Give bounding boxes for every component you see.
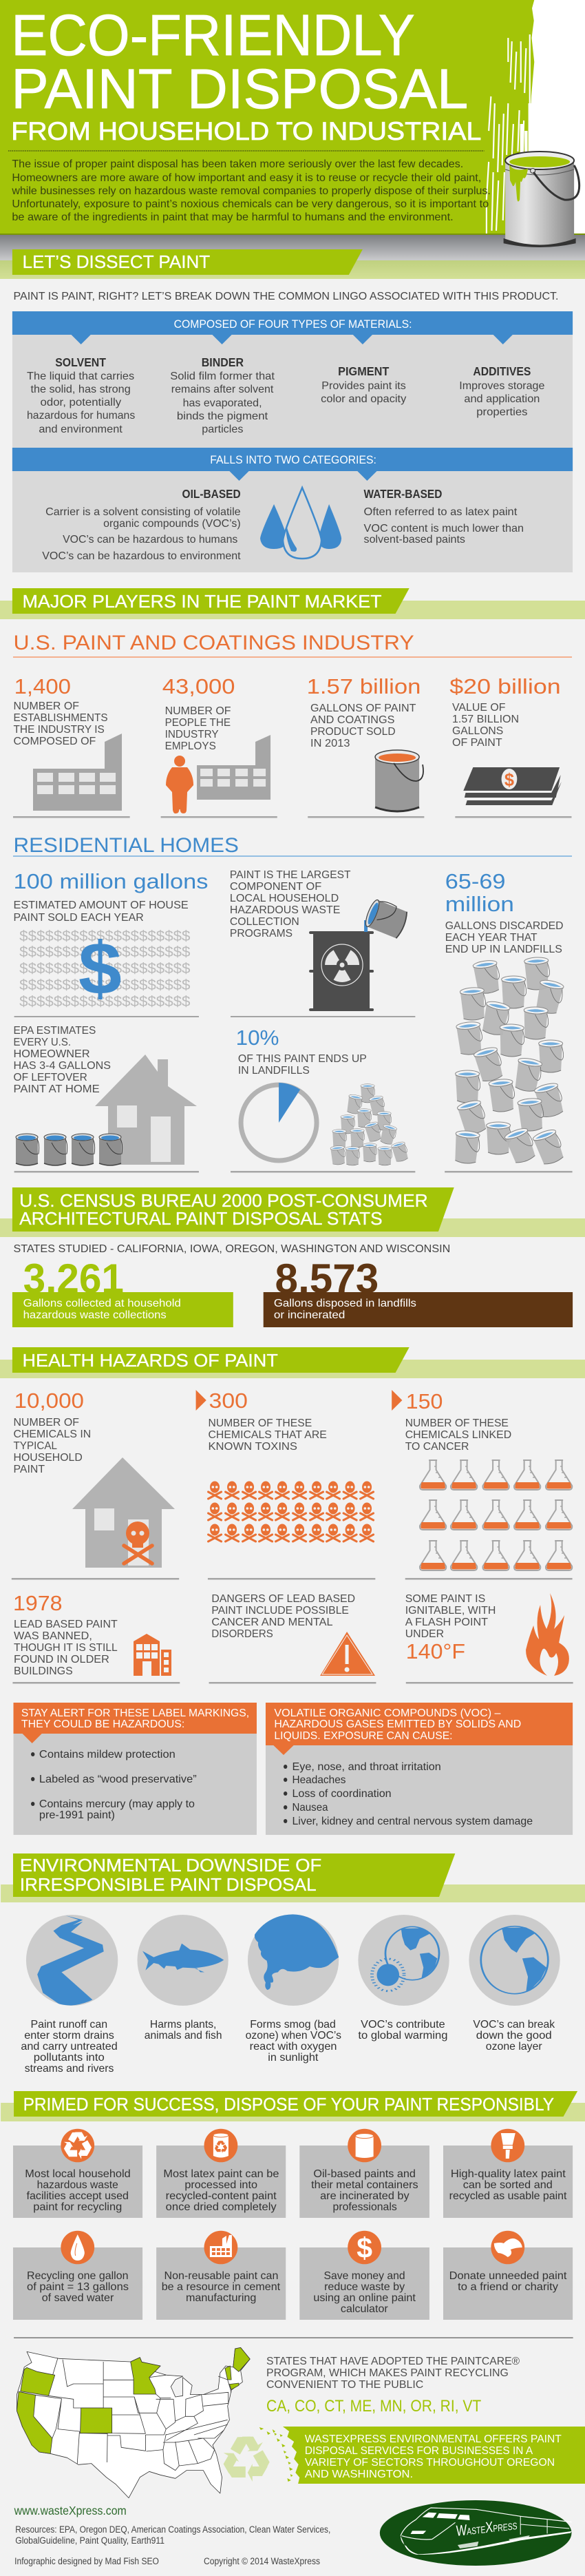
stat: 300 known toxins: [196, 1389, 375, 1580]
stat: 1.57 billion gallons: 1.57 billion: [307, 675, 421, 698]
stat: EPA leftover paint estimate: EVERY U.S.: [14, 1035, 71, 1048]
card: household hazardous facilities: [13, 2128, 142, 2218]
panel: volatile organic compounds: Eye, nose, and throat irritation: [292, 1760, 441, 1773]
subheader: two categories: [12, 448, 573, 481]
intro sentence: paint lingo: PAINT IS PAINT, RIGHT? LET’S BREAK DOWN THE COMMON LINGO ASSOCIATED WITH THIS PRODUCT.: [14, 289, 559, 302]
stat: EPA leftover paint estimate: HOMEOWNER: [14, 1047, 90, 1060]
stat: 150 linked to cancer: 150: [406, 1390, 443, 1413]
card: oil-based incinerated: are incinerated by: [320, 2189, 410, 2202]
panel: volatile organic compounds: Headaches: [292, 1773, 346, 1786]
material: binder: particles: [202, 422, 243, 435]
section heading: environmental downside: IRRESPONSIBLE PAINT DISPOSAL: [20, 1876, 317, 1895]
text: PaintCare program: CA, CO, CT, ME, MN, OR, RI, VT: [266, 2398, 482, 2416]
card: cement manufacturing: manufacturing: [186, 2291, 256, 2304]
stat: largest component of waste: COLLECTION: [230, 915, 299, 928]
stat: EPA leftover paint estimate: OF LEFTOVER: [14, 1070, 87, 1083]
stat: 1978 lead paint ban: LEAD BASED PAINT: [14, 1617, 118, 1630]
stat: 65-69 million gallons discarded: END UP IN LANDFILLS: [445, 942, 562, 955]
stat: 43,000 people: 43,000: [162, 675, 235, 698]
icon: paint brush: [501, 2133, 515, 2159]
card: high-quality latex: High-quality latex paint: [451, 2167, 566, 2180]
item: forms smog: Forms smog (bad: [250, 2017, 336, 2030]
stat: 3,261 gallons collected: Gallons collected at household: [23, 1296, 181, 1309]
stat: 1,400 establishments: COMPOSED OF: [14, 734, 96, 747]
stat: 10 percent ends up in landfills: [231, 1026, 415, 1172]
stat: largest component of waste: [230, 868, 415, 1017]
text: resources and credits: [14, 2525, 330, 2567]
stat: dangers of lead paint: DISORDERS: [211, 1627, 273, 1640]
icon: factory: [33, 734, 122, 811]
material: binder: [170, 356, 275, 435]
section heading: environmental downside: [1, 1853, 585, 1902]
material: solvent: and environment: [39, 422, 123, 435]
stat: 1.57 billion gallons: [307, 675, 424, 818]
icon: pile of buckets: [454, 957, 566, 1167]
card: online paint calculator: calculator: [341, 2302, 389, 2315]
stat: 300 known toxins: KNOWN TOXINS: [208, 1440, 297, 1453]
category: oil-based: organic compounds (VOC’s): [103, 517, 241, 530]
icon: paint bucket with green drips: [504, 152, 579, 247]
section heading: census bureau: U.S. CENSUS BUREAU 2000 POST-CONSUMER: [19, 1192, 428, 1211]
card: cement manufacturing: [156, 2231, 286, 2320]
stat: 1,400 establishments: NUMBER OF: [14, 699, 79, 712]
section heading: primed for success: PRIMED FOR SUCCESS, DISPOSE OF YOUR PAINT RESPONSIBLY: [23, 2095, 554, 2115]
intro paragraph: Unfortunately, exposure to paint’s noxious chemicals can be very dangerous, so it is important to: [12, 197, 489, 210]
item: ozone layer: ozone layer: [486, 2039, 543, 2053]
card: latex paint recycled content: [156, 2129, 286, 2218]
icon: rows of dollar signs: $$$$$$$$$$$$$$$$$$$$: [19, 928, 191, 944]
banner: WasteXpress services: DISPOSAL SERVICES FOR BUSINESSES IN A: [305, 2444, 533, 2457]
panel: label markings: Labeled as “wood preservative”: [39, 1772, 197, 1785]
card: online paint calculator: using an online paint: [313, 2291, 416, 2304]
text: PaintCare program: CONVENIENT TO THE PUBLIC: [266, 2378, 423, 2391]
item: global warming: [358, 1915, 449, 2042]
banner: WasteXpress services: [259, 2427, 585, 2484]
item: storm drain runoff: pollutants into: [34, 2050, 105, 2064]
card: oil-based incinerated: professionals: [333, 2200, 397, 2213]
category: oil-based: VOC’s can be hazardous to humans: [63, 532, 237, 546]
category: oil-based: [42, 488, 241, 562]
stat: 1.57 billion gallons: PRODUCT SOLD: [310, 725, 396, 738]
stat: 8,573 gallons landfilled: Gallons disposed in landfills: [274, 1296, 416, 1309]
icon: metal can: [356, 2134, 374, 2158]
stat: EPA leftover paint estimate: [14, 1024, 199, 1172]
icon: warning triangle: [320, 1632, 375, 1676]
card: online paint calculator: reduce waste by: [324, 2280, 405, 2293]
card: online paint calculator: Save money and: [324, 2269, 405, 2282]
panel: four types of materials: [12, 311, 573, 572]
logo: WasteXpress train: W ASTE XPRESS: [456, 2515, 518, 2539]
card: household hazardous facilities: paint for recycling: [33, 2200, 122, 2213]
logo: WasteXpress train: [380, 2500, 572, 2566]
stat: 300 known toxins: 300: [209, 1389, 248, 1413]
text: PaintCare program: PROGRAM, WHICH MAKES PAINT RECYCLING: [266, 2366, 509, 2379]
item: harms wildlife: animals and fish: [145, 2028, 222, 2042]
stat: 65-69 million gallons discarded: EACH YEAR THAT: [445, 931, 538, 944]
item: storm drain runoff: and carry untreated: [21, 2039, 118, 2053]
intro paragraph: be aware of the ingredients in paint that may be harmful to humans and the environment.: [12, 210, 454, 223]
icon: rows of skulls: [209, 1481, 374, 1541]
material: solvent: odor, potentially: [41, 395, 122, 408]
stat: largest component of waste: HAZARDOUS WASTE: [230, 903, 341, 916]
card: oil-based incinerated: Oil-based paints and: [313, 2167, 416, 2180]
category: oil-based: VOC’s can be hazardous to environment: [42, 549, 241, 562]
icon: recycling arrows: [59, 2128, 96, 2159]
category: water-based: Often referred to as latex paint: [364, 505, 518, 518]
panel: four types of materials: COMPOSED OF FOUR TYPES OF MATERIALS:: [174, 318, 412, 331]
material: binder: remains after solvent: [171, 382, 274, 395]
stat: $20 billion: $20 billion: [449, 675, 561, 698]
icon: faint recycling symbol: [216, 2429, 277, 2482]
stat: 10,000 chemicals: 10,000: [14, 1389, 84, 1413]
intro paragraph: [11, 157, 491, 223]
icon: cement plant: [210, 2235, 232, 2257]
stat: 10 percent ends up in landfills: OF THIS PAINT ENDS UP: [238, 1052, 367, 1065]
card: high-quality latex: [443, 2129, 573, 2218]
item: ozone layer: VOC’s can break: [473, 2017, 555, 2030]
banner: WasteXpress services: VARIETY OF SECTORS THROUGHOUT OREGON: [305, 2455, 555, 2469]
stat: 150 linked to cancer: TO CANCER: [405, 1440, 469, 1453]
card: oil-based incinerated: their metal containers: [311, 2178, 418, 2191]
icon: earth: [481, 1926, 548, 1994]
stat: 150 linked to cancer: CHEMICALS LINKED: [405, 1428, 511, 1441]
text: resources and credits: Infographic designed by Mad Fish SEO: [14, 2557, 159, 2567]
stat: $20 billion: VALUE OF: [452, 700, 506, 714]
stat: largest component of waste: PAINT IS THE LARGEST: [230, 868, 351, 881]
card: household hazardous facilities: facilities accept used: [26, 2189, 129, 2202]
icon: house with four buckets: [16, 1055, 197, 1165]
intro paragraph: The issue of proper paint disposal has been taken more seriously over the last few decades.: [12, 157, 463, 170]
stat: flash point 140F: UNDER: [405, 1627, 444, 1640]
panel: label markings: pre-1991 paint): [39, 1808, 115, 1821]
section heading: major players: MAJOR PLAYERS IN THE PAINT MARKET: [23, 592, 382, 612]
panel: label markings: THEY COULD BE HAZARDOUS:: [21, 1717, 184, 1730]
intro paragraph: Homeowners are more aware of how important and easy it is to reuse or recycle their old paint,: [12, 171, 481, 184]
stat: 43,000 people: NUMBER OF: [165, 704, 231, 717]
panel: label markings: Contains mildew protection: [39, 1747, 176, 1760]
stat: EPA leftover paint estimate: HAS 3-4 GALLONS: [14, 1059, 111, 1072]
stat: 10 percent ends up in landfills: 10%: [236, 1026, 279, 1050]
icon: paint drops: [260, 488, 341, 559]
category: water-based: solvent-based paints: [364, 532, 465, 546]
stat: dangers of lead paint: DANGERS OF LEAD BASED: [211, 1592, 355, 1605]
card: cement manufacturing: be a resource in cement: [162, 2280, 281, 2293]
icon: rows of dollar signs: $$$$$$$$$$$$$$$$$$$$: [19, 944, 191, 960]
material: additives: and application: [464, 392, 540, 405]
category: water-based: [364, 488, 524, 546]
stat: 1.57 billion gallons: IN 2013: [310, 736, 350, 749]
stat: $20 billion: GALLONS: [452, 724, 503, 737]
icon: old building: [134, 1634, 171, 1676]
icon: orange paint bucket: [375, 750, 423, 811]
panel: label markings: [14, 1703, 257, 1835]
panel: label markings: STAY ALERT FOR THESE LABEL MARKINGS,: [21, 1706, 249, 1719]
card: latex paint recycled content: recycled-content paint: [166, 2189, 277, 2202]
item: ozone layer: [469, 1915, 560, 2053]
stat: $20 billion: OF PAINT: [452, 736, 502, 749]
main title: ECO-FRIENDLY: [11, 3, 415, 68]
stat: 10,000 chemicals: TYPICAL: [14, 1439, 57, 1452]
text: PaintCare program: STATES THAT HAVE ADOPTED THE PAINTCARE®: [266, 2354, 520, 2367]
header: title banner: [0, 0, 585, 279]
icon: rows of dollar signs: $$$$$$$$$$$$$$$$$$$$: [19, 993, 191, 1010]
panel: volatile organic compounds: VOLATILE ORGANIC COMPOUNDS (VOC) –: [274, 1706, 502, 1719]
stat: flash point 140F: 140°F: [406, 1640, 465, 1663]
stat: 1.57 billion gallons: AND COATINGS: [310, 713, 395, 726]
icon: house with skull: [72, 1457, 175, 1568]
stat: 8,573 gallons landfilled: or incinerated: [274, 1308, 345, 1321]
icon: barrel with pouring bucket: [310, 897, 410, 1011]
section heading: health hazards: [0, 1347, 585, 1378]
item: ozone layer: down the good: [476, 2028, 552, 2042]
stat: 1,400 establishments: 1,400: [14, 675, 71, 698]
stat: 3,261 gallons collected: hazardous waste collections: [23, 1308, 167, 1321]
section heading: census bureau: ARCHITECTURAL PAINT DISPOSAL STATS: [19, 1209, 383, 1229]
panel: volatile organic compounds: Loss of coordination: [292, 1787, 392, 1800]
category: oil-based: OIL-BASED: [182, 488, 241, 501]
stat: flash point 140F: SOME PAINT IS: [405, 1592, 485, 1605]
icon: water drop: [71, 2234, 85, 2261]
material: pigment: color and opacity: [321, 392, 407, 405]
card: donate paint: Donate unneeded paint: [449, 2269, 567, 2282]
material: binder: BINDER: [202, 356, 244, 370]
stat: 10,000 chemicals: PAINT: [14, 1462, 45, 1475]
stat: 8,573 gallons landfilled: [264, 1256, 573, 1327]
stat: 65-69 million gallons discarded: 65-69: [445, 870, 506, 893]
material: binder: has evaporated,: [183, 396, 262, 409]
section heading: census bureau: [0, 1187, 585, 1237]
stat: EPA leftover paint estimate: EPA ESTIMATES: [14, 1024, 96, 1037]
material: binder: Solid film former that: [170, 369, 275, 382]
item: forms smog: ozone) when VOC’s: [246, 2028, 341, 2042]
text: states studied: STATES STUDIED - CALIFORNIA, IOWA, OREGON, WASHINGTON AND WISCONSIN: [14, 1242, 450, 1255]
material: solvent: SOLVENT: [55, 356, 106, 370]
stat: 1,400 establishments: THE INDUSTRY IS: [14, 723, 105, 736]
stat: 43,000 people: [161, 675, 277, 818]
stat: 1978 lead paint ban: WAS BANNED,: [14, 1629, 92, 1642]
green painted banner: [0, 0, 534, 234]
stat: 300 known toxins: NUMBER OF THESE: [208, 1416, 312, 1429]
intro paragraph: while businesses rely on hazardous waste removal companies to properly dispose of their surplus.: [11, 184, 491, 197]
icon: rows of dollar signs: $$$$$$$$$$$$$$$$$$$$: [19, 977, 191, 993]
stat: 10,000 chemicals: CHEMICALS IN: [14, 1427, 91, 1440]
text: website: www.wasteXpress.com: [14, 2504, 127, 2518]
card: household hazardous facilities: hazardous waste: [37, 2178, 118, 2191]
icon: rows of dollar signs: [19, 928, 191, 1010]
stat: 10 percent ends up in landfills: IN LANDFILLS: [238, 1063, 310, 1077]
item: harms wildlife: [137, 1915, 228, 2042]
card: high-quality latex: can be sorted and: [463, 2178, 553, 2191]
stat: 1978 lead paint ban: BUILDINGS: [14, 1664, 73, 1677]
map: PaintCare states: [17, 2347, 250, 2498]
card: donate paint: to a friend or charity: [458, 2280, 559, 2293]
material: additives: ADDITIVES: [473, 365, 531, 379]
stat: $20 billion: [449, 675, 571, 818]
material: additives: [459, 365, 544, 418]
item: storm drain runoff: enter storm drains: [24, 2028, 114, 2042]
stat: flash point 140F: A FLASH POINT: [405, 1615, 488, 1628]
item: global warming: VOC’s contribute: [361, 2017, 445, 2030]
stat: 65-69 million gallons discarded: million: [445, 893, 514, 916]
material: pigment: [321, 365, 407, 405]
panel: label markings: Contains mercury (may apply to: [39, 1797, 195, 1810]
icon: recycling can: [213, 2133, 229, 2157]
panel: volatile organic compounds: Liver, kidney and central nervous system damage: [292, 1814, 533, 1827]
subheading: residential homes: RESIDENTIAL HOMES: [14, 834, 239, 857]
stat: 1978 lead paint ban: FOUND IN OLDER: [14, 1652, 109, 1665]
stat: 43,000 people: INDUSTRY: [165, 727, 219, 740]
panel: volatile organic compounds: Nausea: [292, 1800, 328, 1814]
stat: flash point 140F: IGNITABLE, WITH: [405, 1603, 496, 1617]
category: oil-based: Carrier is a solvent consisting of volatile: [45, 505, 241, 518]
panel: volatile organic compounds: HAZARDOUS GASES EMITTED BY SOLIDS AND: [274, 1717, 521, 1730]
stat: flash point 140F: [405, 1592, 573, 1683]
stat: 3,261 gallons collected: 3,261: [23, 1256, 124, 1302]
stat: 1978 lead paint ban: 1978: [13, 1592, 63, 1615]
text: resources and credits: Resources: EPA, Oregon DEQ, American Coatings Association, Clean Water Services,: [15, 2525, 330, 2535]
category: water-based: WATER-BASED: [364, 488, 442, 501]
icon: smog cloud: [255, 1914, 339, 1990]
stat: 150 linked to cancer: NUMBER OF THESE: [405, 1416, 509, 1429]
item: forms smog: [246, 1914, 341, 2064]
stat: 43,000 people: PEOPLE THE: [165, 716, 231, 729]
stat: 100 million gallons: PAINT SOLD EACH YEAR: [14, 911, 144, 924]
card: cement manufacturing: Non-reusable paint can: [164, 2269, 278, 2282]
material: solvent: [27, 356, 135, 435]
stat: 10,000 chemicals: HOUSEHOLD: [14, 1451, 83, 1464]
icon: giving hand: [494, 2239, 522, 2257]
chart: ten percent pie: [241, 1083, 317, 1161]
stat: largest component of waste: LOCAL HOUSEHOLD: [230, 891, 339, 904]
stat: 1978 lead paint ban: [12, 1592, 180, 1683]
text: PaintCare program: [266, 2354, 520, 2416]
section heading: health hazards: HEALTH HAZARDS OF PAINT: [23, 1351, 278, 1371]
stat: dangers of lead paint: CANCER AND MENTAL: [211, 1615, 333, 1628]
stat: 10,000 chemicals: NUMBER OF: [14, 1415, 79, 1429]
icon: stack of money: [463, 767, 562, 805]
stat: 65-69 million gallons discarded: [445, 870, 573, 1172]
stat: 100 million gallons: ESTIMATED AMOUNT OF HOUSE: [14, 898, 189, 911]
icon: dollar sign: $: [357, 2232, 372, 2265]
stat: 1,400 establishments: ESTABLISHMENTS: [14, 711, 108, 724]
stat: dangers of lead paint: [209, 1592, 376, 1683]
item: forms smog: react with oxygen: [250, 2039, 337, 2053]
card: high-quality latex: recycled as usable paint: [449, 2189, 567, 2202]
subheading: U.S. paint and coatings industry: U.S. PAINT AND COATINGS INDUSTRY: [14, 632, 414, 654]
material: additives: Improves storage: [459, 379, 544, 392]
stat: 65-69 million gallons discarded: GALLONS DISCARDED: [445, 919, 564, 932]
stat: 43,000 people: EMPLOYS: [165, 739, 216, 752]
card: oil-based incinerated: [299, 2129, 429, 2218]
stat: largest component of waste: COMPONENT OF: [230, 880, 321, 893]
main title: [11, 3, 481, 146]
icon: earth and sun: [372, 1926, 439, 1991]
panel: volatile organic compounds: LIQUIDS. EXPOSURE CAN CAUSE:: [274, 1729, 453, 1742]
main title: PAINT DISPOSAL: [11, 56, 468, 120]
card: donate paint: [443, 2231, 573, 2320]
material: binder: binds the pigment: [177, 409, 268, 422]
icon: flame: [526, 1593, 569, 1676]
item: global warming: to global warming: [358, 2028, 448, 2042]
category: water-based: VOC content is much lower than: [364, 521, 524, 534]
stat: 1978 lead paint ban: THOUGH IT IS STILL: [14, 1641, 118, 1654]
icon: rows of dollar signs: $$$$$$$$$$$$$$$$$$$$: [19, 960, 191, 977]
main title: FROM HOUSEHOLD TO INDUSTRIAL: [11, 118, 481, 146]
material: solvent: the solid, has strong: [30, 382, 131, 395]
stat: dangers of lead paint: PAINT INCLUDE POSSIBLE: [211, 1603, 349, 1617]
item: harms wildlife: Harms plants,: [150, 2017, 216, 2030]
subheader: two categories: FALLS INTO TWO CATEGORIES:: [210, 453, 376, 466]
icon: rows of flasks: [420, 1460, 572, 1570]
card: latex paint recycled content: processed into: [184, 2178, 257, 2191]
card: saved water: of paint = 13 gallons: [27, 2280, 129, 2293]
stat: largest component of waste: PROGRAMS: [230, 926, 292, 939]
stat: 100 million gallons: 100 million gallons: [14, 870, 208, 893]
text: resources and credits: GlobalGuideline, Paint Quality, Earth911: [15, 2536, 164, 2546]
section heading: major players: [0, 588, 585, 619]
section heading: let's dissect paint: LET’S DISSECT PAINT: [23, 253, 210, 272]
section heading: environmental downside: ENVIRONMENTAL DOWNSIDE OF: [20, 1856, 321, 1876]
icon: big dollar sign: $: [78, 927, 122, 1010]
card: saved water: of saved water: [42, 2291, 114, 2304]
stat: $20 billion: 1.57 BILLION: [452, 712, 519, 725]
card: saved water: [13, 2231, 142, 2320]
icon: worker and factory: [166, 735, 270, 813]
card: online paint calculator: [299, 2231, 429, 2320]
banner: WasteXpress services: WASTEXPRESS ENVIRONMENTAL OFFERS PAINT: [305, 2432, 562, 2445]
stat: 3,261 gallons collected: [12, 1256, 233, 1327]
item: forms smog: in sunlight: [268, 2050, 319, 2064]
card: household hazardous facilities: Most local household: [25, 2167, 131, 2180]
item: storm drain runoff: [21, 1915, 118, 2075]
stat: 300 known toxins: CHEMICALS THAT ARE: [208, 1428, 327, 1441]
stat: EPA leftover paint estimate: PAINT AT HOME: [14, 1082, 100, 1095]
card: saved water: Recycling one gallon: [27, 2269, 128, 2282]
icon: river: [37, 1915, 104, 2006]
material: additives: properties: [476, 405, 528, 418]
stat: 1.57 billion gallons: GALLONS OF PAINT: [310, 701, 416, 714]
stat: 100 million gallons: [14, 870, 208, 1017]
icon: stack of money: $: [504, 771, 514, 790]
banner: WasteXpress services: AND WASHINGTON.: [305, 2467, 413, 2480]
material: solvent: hazardous for humans: [27, 408, 135, 422]
section heading: primed for success: [1, 2091, 585, 2121]
item: storm drain runoff: Paint runoff can: [30, 2017, 107, 2030]
text: resources and credits: Copyright © 2014 WasteXpress: [204, 2557, 321, 2567]
panel: volatile organic compounds: [266, 1703, 573, 1835]
stat: 1,400 establishments: [13, 675, 130, 818]
item: storm drain runoff: streams and rivers: [25, 2061, 114, 2075]
material: solvent: The liquid that carries: [27, 369, 134, 382]
material: pigment: PIGMENT: [338, 365, 390, 379]
stat: 8,573 gallons landfilled: 8,573: [275, 1256, 379, 1302]
icon: small bucket pile: [330, 1084, 410, 1165]
material: pigment: Provides paint its: [321, 379, 406, 392]
card: latex paint recycled content: once dried completely: [166, 2200, 277, 2213]
stat: 150 linked to cancer: [392, 1390, 573, 1580]
section heading: let's dissect paint: [12, 249, 363, 275]
stat: 10,000 chemicals: [12, 1389, 179, 1580]
card: latex paint recycled content: Most latex paint can be: [163, 2167, 279, 2180]
icon: fish: [142, 1944, 224, 1972]
